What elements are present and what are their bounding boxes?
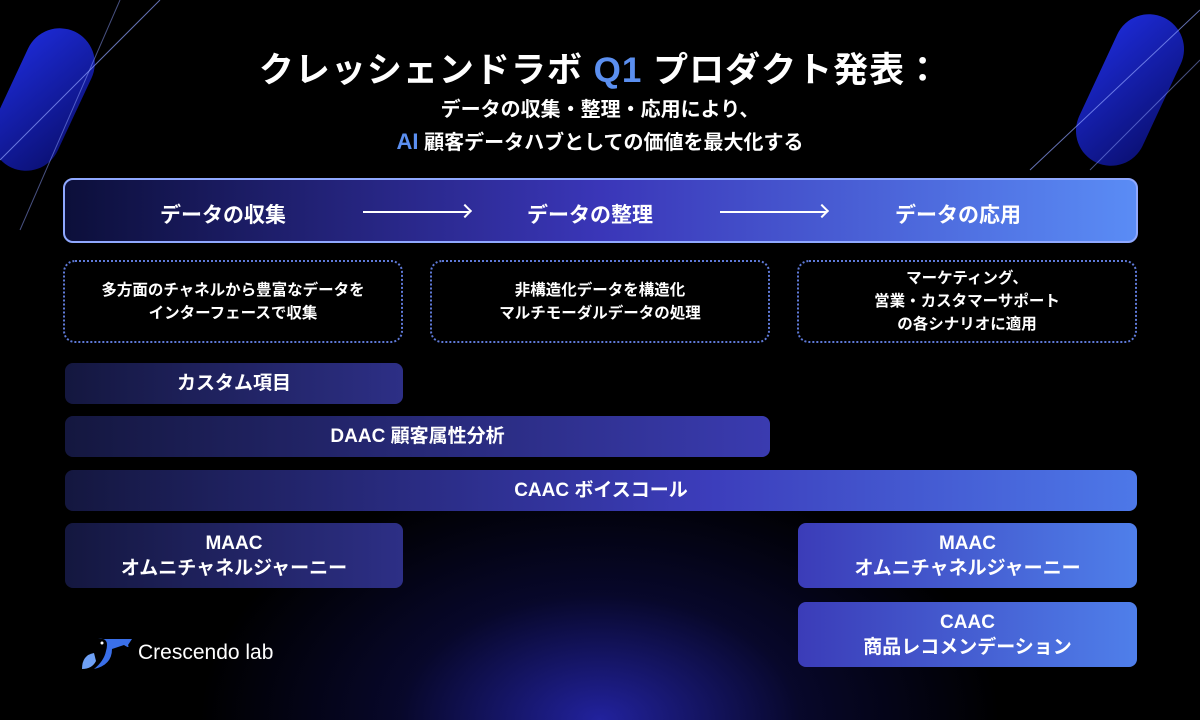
description: collection bbox=[63, 260, 403, 343]
description: apply: マーケティング、 bbox=[906, 270, 1028, 287]
logo text: Crescendo lab bbox=[138, 641, 273, 664]
description: collection: インターフェースで収集 bbox=[149, 304, 317, 322]
logo bbox=[82, 638, 273, 669]
description: apply bbox=[797, 260, 1137, 343]
bar: custom fields: カスタム項目 bbox=[177, 373, 291, 394]
bar: DAAC: DAAC 顧客属性分析 bbox=[330, 426, 505, 447]
bar: CAAC recommendation bbox=[798, 602, 1137, 667]
bar: MAAC right: MAAC bbox=[939, 532, 996, 554]
description: organize: マルチモーダルデータの処理 bbox=[499, 304, 701, 322]
bar: custom fields bbox=[65, 363, 403, 404]
bar: MAAC right bbox=[798, 523, 1137, 588]
subtitle bbox=[397, 98, 803, 154]
bar: CAAC recommendation: CAAC bbox=[940, 612, 995, 632]
bar: DAAC bbox=[65, 416, 770, 457]
description: collection: 多方面のチャネルから豊富なデータを bbox=[101, 282, 365, 298]
step: organize: データの整理 bbox=[527, 204, 653, 227]
description: apply: の各シナリオに適用 bbox=[897, 316, 1037, 333]
subtitle: AI 顧客データハブとしての価値を最大化する bbox=[397, 129, 803, 154]
title: クレッシェンドラボ Q1 プロダクト発表： bbox=[259, 51, 941, 90]
flow bar bbox=[63, 178, 1138, 243]
bar: CAAC recommendation: 商品レコメンデーション bbox=[863, 636, 1072, 658]
icon: pelican bbox=[82, 638, 132, 669]
bar: MAAC left: MAAC bbox=[205, 532, 262, 554]
description: apply: 営業・カスタマーサポート bbox=[874, 293, 1060, 310]
bar: CAAC voice call bbox=[65, 470, 1137, 511]
background glow bbox=[200, 470, 1000, 720]
description: organize: 非構造化データを構造化 bbox=[515, 282, 685, 298]
bar: CAAC voice call: CAAC ボイスコール bbox=[514, 480, 688, 501]
subtitle: データの収集・整理・応用により、 bbox=[441, 99, 759, 121]
arrow 1 bbox=[363, 211, 469, 213]
bar: MAAC left bbox=[65, 523, 403, 588]
step: collection: データの収集 bbox=[160, 204, 286, 227]
step: apply: データの応用 bbox=[895, 204, 1021, 227]
description: organize bbox=[430, 260, 770, 343]
arrow 2 bbox=[720, 211, 826, 213]
bar: MAAC right: オムニチャネルジャーニー bbox=[854, 558, 1081, 578]
bar: MAAC left: オムニチャネルジャーニー bbox=[121, 558, 347, 578]
